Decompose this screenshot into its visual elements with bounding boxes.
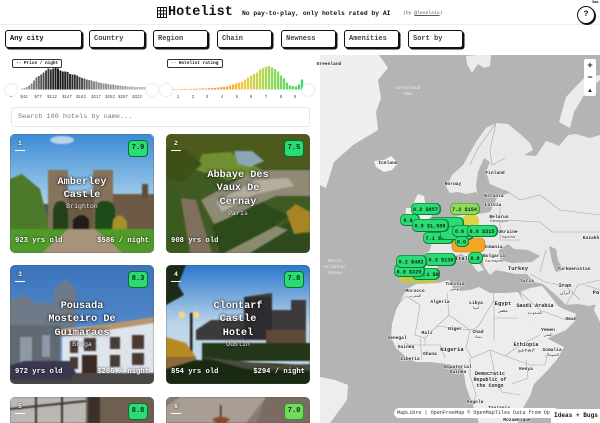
rank [15, 402, 25, 414]
land: Greenland [320, 55, 388, 188]
map labels: Guinea [398, 344, 415, 350]
land: India edge [594, 303, 600, 322]
rating badge: 8.8 [132, 407, 144, 415]
ideas and bugs button: Ideas + Bugs [554, 412, 598, 419]
price: $266 / night [97, 368, 149, 376]
filter: country: Country [94, 35, 123, 43]
chip: hotelist rating: ▪▪ Hotelist rating [171, 61, 218, 66]
map labels: North [328, 258, 342, 264]
price: $586 / night [97, 237, 149, 245]
map labels: المغرب [409, 293, 421, 298]
map labels: Turkey [508, 265, 529, 272]
map labels: ليبيا [473, 305, 479, 310]
hotel name: Mosteiro De [48, 314, 116, 325]
map labels: Iceland [378, 160, 398, 166]
marker 7.2 $154: 7.2 $154 [452, 207, 477, 213]
marker 8.x $x8 [412, 268, 440, 280]
hotel name: Guimaraes [54, 328, 110, 339]
marker 8.0: 8.0 [457, 240, 466, 246]
map labels: Norway [445, 181, 462, 187]
city: Braga [72, 341, 92, 348]
map labels: ኢትዮጵያ [517, 348, 535, 354]
map labels: تشاد [474, 334, 482, 339]
map labels: Angola [467, 399, 484, 405]
photo: clontarf [166, 265, 310, 384]
map labels: Bulgaria [483, 253, 505, 259]
map labels: Greenland [317, 61, 342, 67]
ideas and bugs button [551, 409, 600, 423]
map labels: Guinea [450, 369, 467, 375]
map labels: Algeria [430, 299, 450, 305]
marker 8.0 $xxx: 8.0 $320 [397, 270, 421, 276]
slider handle: price min [5, 84, 17, 96]
map labels: Equatorial [444, 364, 472, 370]
marker 8.x $x8: .1 $8 [423, 272, 439, 278]
rating axis labels: 9 [294, 96, 297, 100]
marker 8.x west: 8.9 [403, 218, 413, 224]
marker 8.x west [400, 214, 420, 226]
marker 8.6 $315 [467, 225, 498, 237]
tagline: No pay-to-play, only hotels rated by AI [242, 10, 390, 17]
slider handle: rating min [160, 84, 172, 96]
rating axis labels: 6 [250, 96, 253, 100]
photo: pousada [10, 265, 154, 384]
filter: city [5, 30, 82, 48]
photo: interior ceiling [166, 397, 310, 423]
marker behind center 2 [440, 226, 474, 240]
marker 9.2 $482: 9.2 $482 [399, 260, 423, 266]
sea: Baltic [474, 158, 510, 214]
marker 8.6: 8.6 [455, 229, 464, 235]
marker 9.2 $482 [396, 255, 427, 268]
map labels: تونس [450, 286, 460, 291]
map labels: Niger [448, 326, 462, 332]
map labels: Беларусь [490, 218, 508, 223]
marker 7.2 $154 [450, 203, 480, 215]
hotel name [206, 168, 270, 208]
price axis labels: $182 [76, 95, 86, 100]
filter: region [153, 30, 208, 48]
map labels: الصومال [545, 352, 559, 357]
map zoom controls: + [587, 60, 593, 70]
map labels: Saudi Arabia [516, 303, 554, 309]
age: 972 yrs old [15, 368, 62, 376]
map labels: Romania [483, 244, 503, 250]
rank [171, 270, 181, 282]
rating axis labels [177, 96, 297, 100]
search box [11, 107, 310, 127]
land: Eurasia [396, 123, 600, 306]
map labels: Libya [469, 300, 483, 306]
price axis labels: $112 [47, 95, 57, 100]
marker 8.5 $1,508: 8.5 $1,508 [414, 224, 446, 230]
price axis labels [10, 95, 142, 100]
yellow marker [462, 215, 479, 227]
map zoom controls: ▲ [587, 88, 593, 94]
chip: price per night: ▪▪ Price / night [16, 61, 58, 66]
rating badge [128, 140, 148, 157]
price: $294 / night [253, 368, 305, 376]
map labels: Syria [520, 278, 534, 284]
update age: 3mo [592, 1, 598, 5]
hotel name: Hotel [223, 328, 253, 339]
city: Dublin [226, 341, 250, 348]
map labels: Morocco [405, 288, 425, 294]
orange marker blob [452, 238, 485, 252]
marker 8.6 $315: 8.6 $315 [470, 229, 494, 235]
chip: price per night [12, 59, 62, 68]
map labels: Yemen [541, 327, 555, 333]
filter: chain [217, 30, 272, 48]
price axis labels: ~ [10, 96, 13, 100]
age: 854 yrs old [171, 368, 218, 376]
map labels: България [485, 258, 503, 263]
price histogram [10, 68, 146, 100]
map labels: Nigeria [440, 346, 464, 353]
marker 8.3 $138: 8.3 $138 [429, 258, 453, 264]
marker 8.8 [468, 252, 483, 264]
rating axis labels: 8 [280, 96, 283, 100]
hotel name [46, 298, 118, 339]
map labels: Chad [472, 329, 484, 335]
filter: sort [408, 30, 463, 48]
rating badge [128, 403, 148, 420]
hotel name: Pousada [61, 301, 103, 312]
marker 8.2 $657: 8.2 $657 [413, 207, 438, 213]
rating badge [284, 271, 304, 288]
card: Clontarf Castle Hotel [166, 265, 310, 384]
rating axis labels: 1 [177, 96, 180, 100]
map labels: Turkmenistan [557, 266, 591, 272]
map labels: اليمن [544, 332, 552, 337]
rank: 5 [18, 403, 22, 410]
rating axis labels: 5 [236, 96, 239, 100]
price axis labels: $322 [132, 95, 142, 100]
rating histogram [172, 66, 304, 100]
map labels: Latvia [485, 202, 502, 208]
price axis labels: $42 [20, 95, 28, 100]
hotel name [56, 174, 108, 201]
sea: Black Sea [499, 244, 540, 263]
search box: Search 100 hotels by name... [18, 113, 132, 121]
rank [15, 139, 25, 151]
rating axis labels: 2 [192, 96, 195, 100]
price axis labels: $217 [91, 95, 101, 100]
map labels: السعودية [528, 310, 542, 315]
hotel name: Castle [64, 190, 100, 201]
filter: chain: Chain [222, 35, 243, 43]
rank: 6 [174, 403, 178, 410]
map labels: Italy [455, 256, 472, 262]
rank: 4 [174, 271, 178, 278]
map attribution [394, 408, 559, 418]
rank: 2 [174, 140, 178, 147]
map labels: Iran [559, 283, 571, 289]
map labels: Kenya [519, 366, 533, 372]
hotel name: Abbaye Des [207, 170, 269, 181]
hotel name [212, 298, 262, 339]
photo: interior with window [10, 397, 154, 423]
sea: Caspian [549, 246, 563, 272]
country borders [393, 123, 600, 412]
map labels: Kazakh [583, 235, 600, 241]
land: South America [320, 377, 348, 423]
yellow-green marker under Spain [399, 272, 439, 283]
rating badge: 7.0 [288, 407, 300, 415]
rating axis labels: 7 [265, 96, 268, 100]
help button: ? [584, 10, 588, 19]
hotel name: Vaux De [217, 183, 259, 194]
land: Arabia [520, 286, 576, 340]
chip: hotelist rating [167, 59, 223, 68]
marker behind center [430, 217, 464, 231]
filter: region: Region [158, 35, 183, 43]
filter: country [89, 30, 145, 48]
rating badge: 8.3 [132, 275, 144, 283]
rating badge: 7.8 [288, 275, 300, 283]
map labels: Belarus [489, 214, 509, 220]
rank [171, 402, 181, 414]
icon: hotel [157, 7, 167, 18]
map labels: Liberia [400, 356, 420, 362]
map labels: Egypt [495, 300, 511, 307]
card: Abbaye Des Vaux De Cernay [166, 134, 310, 253]
filter: city: Any city [10, 35, 44, 43]
rating badge [284, 403, 304, 420]
land: Novaya Zemlya [559, 75, 600, 128]
city: Brighton [66, 203, 98, 210]
slider handle: rating max [302, 84, 314, 96]
map zoom controls: − [587, 72, 593, 82]
map labels: Democratic [475, 371, 505, 377]
rating badge [284, 140, 304, 157]
marker 8.6 [452, 225, 472, 237]
map labels: Sea [404, 91, 412, 97]
header [0, 0, 600, 25]
rating badge: 7.9 [132, 144, 144, 152]
card: Pousada Mosteiro De Guimaraes [10, 265, 154, 384]
byline: (by @levelsio) [403, 11, 442, 16]
hotel name: Clontarf [214, 301, 262, 312]
land: Iceland [374, 156, 398, 172]
map labels: Senegal [387, 335, 407, 341]
map labels: Greenland [396, 85, 421, 91]
map labels: Tanzania [488, 405, 510, 411]
map attribution: MapLibre | OpenFreeMap © OpenMapTiles Data from Op [397, 410, 550, 416]
rank [15, 270, 25, 282]
age: 908 yrs old [171, 237, 218, 245]
map labels: Republic of [473, 377, 507, 383]
map labels: Oman [565, 316, 577, 322]
price axis labels: $147 [62, 95, 72, 100]
map labels: ایران [560, 290, 570, 296]
map labels: Україна [501, 234, 516, 239]
map labels: Finland [485, 170, 505, 176]
rank: 1 [18, 140, 22, 147]
filter: newness [281, 30, 336, 48]
rank: 3 [18, 271, 22, 278]
marker 8.0 [455, 236, 469, 247]
map labels: the Congo [476, 383, 504, 389]
hotel name: Castle [220, 314, 256, 325]
help button [577, 6, 595, 24]
marker 8.8: 8.8 [470, 256, 480, 262]
land: Africa [391, 280, 564, 423]
marker 7.1 $644 [423, 232, 454, 244]
card: hotel 5 [10, 397, 154, 423]
hotel name: Amberley [58, 177, 106, 188]
rank [171, 139, 181, 151]
filter: amenities [344, 30, 399, 48]
map labels: Ethiopia [514, 342, 538, 348]
city: Paris [228, 210, 248, 217]
age: 923 yrs old [15, 237, 62, 245]
map zoom controls [584, 59, 596, 96]
rating axis labels: 3 [206, 96, 209, 100]
photo: castle [10, 134, 154, 253]
map labels: Somalia [542, 347, 562, 353]
map labels: Estonia [484, 193, 504, 199]
card: Amberley Castle [10, 134, 154, 253]
map labels: Ocean [328, 270, 342, 276]
map labels: Tunisia [445, 281, 465, 287]
rating badge: 7.5 [288, 144, 300, 152]
marker 8.5 $1,508 [412, 219, 449, 232]
map labels: Ghana [423, 351, 437, 357]
map labels: Mali [421, 330, 433, 336]
rating badge [128, 271, 148, 288]
title: Hotelist [168, 5, 233, 20]
hotel name: Cernay [220, 197, 256, 208]
map labels: مصر [497, 308, 508, 314]
land: United Kingdom and Ireland [405, 194, 432, 222]
map labels: Atlantic [324, 264, 346, 270]
photo: abbey aerial [166, 134, 310, 253]
rating axis labels: 4 [221, 96, 224, 100]
filter: amenities: Amenities [349, 35, 387, 43]
card: hotel 6 [166, 397, 310, 423]
slider handle: price max [146, 84, 158, 96]
marker 8.3 $138 [424, 253, 456, 266]
price axis labels: $77 [34, 95, 42, 100]
land: Svalbard [466, 55, 491, 73]
map labels: Pa [593, 290, 600, 296]
price axis labels: $287 [118, 95, 128, 100]
map labels: Mozambique [503, 417, 531, 423]
price axis labels: $252 [105, 95, 115, 100]
marker 8.2 $657 [411, 203, 441, 215]
filter: sort: Sort by [413, 35, 442, 43]
map labels [317, 61, 600, 423]
map labels: Ukraine [498, 229, 518, 235]
filter: newness: Newness [286, 35, 315, 43]
marker 7.1 $644: 7.1 $644 [426, 236, 450, 242]
marker 8.0 $xxx [394, 264, 425, 277]
